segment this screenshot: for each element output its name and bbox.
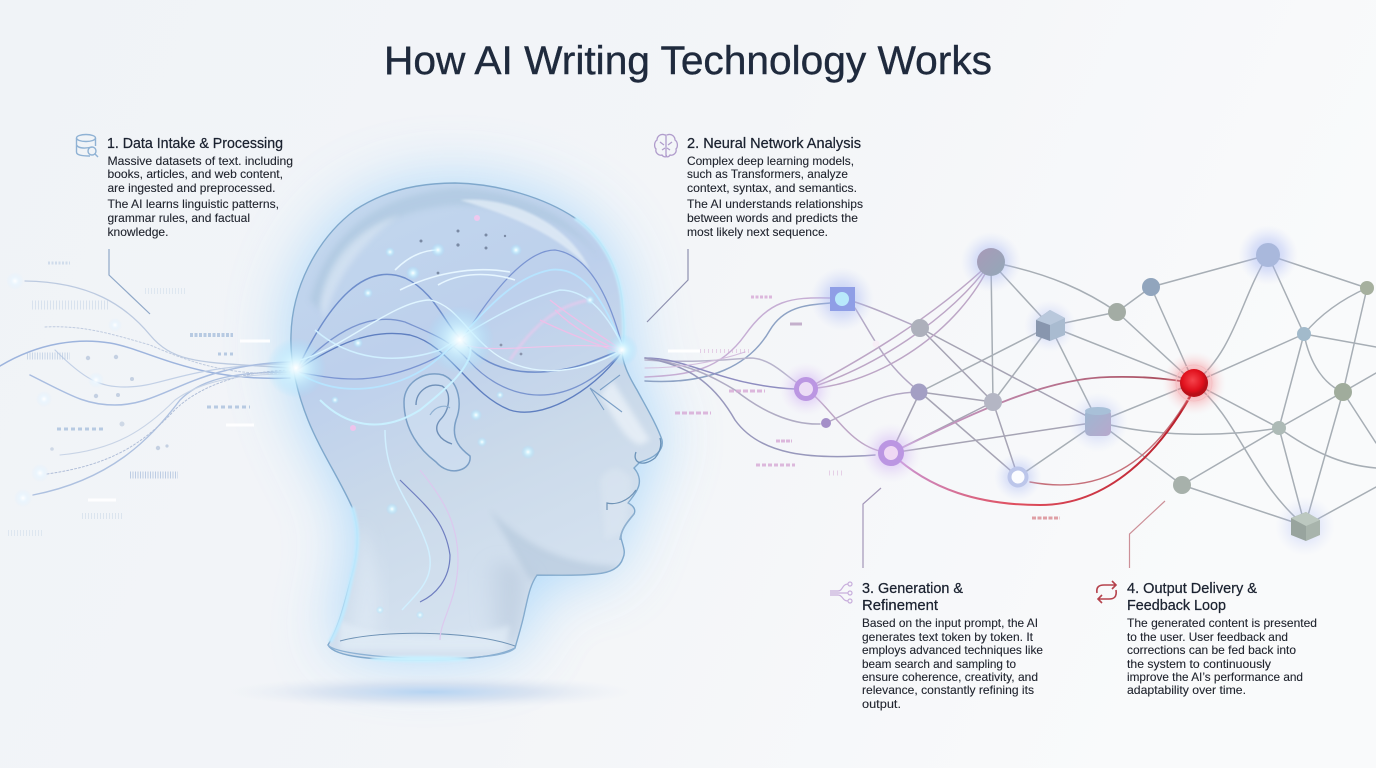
body text: employs advanced techniques like [862,643,1043,657]
heading: 2. Neural Network Analysis [687,135,861,152]
body text [862,616,1043,711]
node glows [779,225,1335,556]
body text: generates text token by token. It [862,630,1034,644]
head rim highlight [330,507,357,642]
body text: are ingested and preprocessed. [108,181,276,195]
body text: The AI understands relationships [687,197,863,211]
neural waves [297,250,622,640]
node: square input [830,287,855,311]
body text: relevance, constantly refining its [862,683,1034,697]
head body [291,183,662,660]
left data streams [0,263,290,533]
stream sparkles [6,272,169,507]
mouth and nose details [590,375,661,540]
neural network [645,255,1376,526]
stream data ticks [8,263,270,533]
icon: brain [655,134,677,157]
body text: beam search and sampling to [862,657,1016,671]
node: small spheres [821,278,1374,494]
heading: Feedback Loop [1127,597,1226,614]
network data ticks [668,297,1060,518]
incoming wires [645,298,875,457]
panel: step 3 [830,580,1043,711]
panel: step 1 [76,134,293,239]
body text: most likely next sequence. [687,225,828,239]
body text: context, syntax, and semantics. [687,181,857,195]
head glow [291,183,662,660]
heading [1127,580,1257,614]
panel: step 2 [655,134,863,239]
body text: The AI learns linguistic patterns, [108,197,279,211]
node: purple ring D [881,443,901,463]
head inner shading [310,188,650,650]
body text: grammar rules, and factual [108,211,250,225]
connector 4 [1130,501,1165,568]
red signal paths [891,377,1194,505]
node: cube top [1036,310,1065,341]
connector 1 [109,249,150,314]
body text: The generated content is presented [1127,616,1317,630]
network connections [806,255,1376,526]
icon: feedback loop [1097,581,1116,603]
body text: the system to continuously [1127,657,1271,671]
connector 3 [863,488,881,568]
heading: Refinement [862,597,939,614]
body text: knowledge. [108,225,168,239]
body text: such as Transformers, analyze [687,167,848,181]
icon: token flow [830,582,852,603]
node: blue sphere [1256,243,1280,267]
node: white ring [1010,468,1026,486]
node: cube bottom [1291,512,1320,541]
body text: corrections can be fed back into [1127,643,1296,657]
node: hub sphere [977,248,1005,276]
heading: 4. Output Delivery & [1127,580,1257,597]
heading [862,580,963,614]
heading: 1. Data Intake & Processing [107,135,283,152]
body text: adaptability over time. [1127,683,1246,697]
body text: Massive datasets of text. including [108,154,293,168]
body text: Based on the input prompt, the AI [862,616,1038,630]
body text: between words and predicts the [687,211,858,225]
title: How AI Writing Technology Works [384,39,992,83]
body text: to the user. User feedback and [1127,630,1288,644]
icon: database search [76,134,98,157]
heading: 3. Generation & [862,580,963,597]
ear [404,374,470,471]
base ring [340,633,515,646]
node: red active [1176,365,1212,401]
head sparkles [266,215,638,619]
panel: step 4 [1097,580,1317,697]
body text: books, articles, and web content, [108,167,283,181]
stream lines [0,281,290,495]
network nodes [779,225,1374,556]
node: cylinder [1085,407,1111,436]
body text: ensure coherence, creativity, and [862,670,1038,684]
body text: output. [862,697,901,711]
body text: improve the AI’s performance and [1127,670,1303,684]
node: purple ring B [796,380,816,398]
head [266,183,662,662]
body text [687,154,863,239]
body text [108,154,293,239]
body text: Complex deep learning models, [687,154,854,168]
connector 2 [647,249,688,322]
body text [1127,616,1317,697]
ground shadow [225,675,635,709]
